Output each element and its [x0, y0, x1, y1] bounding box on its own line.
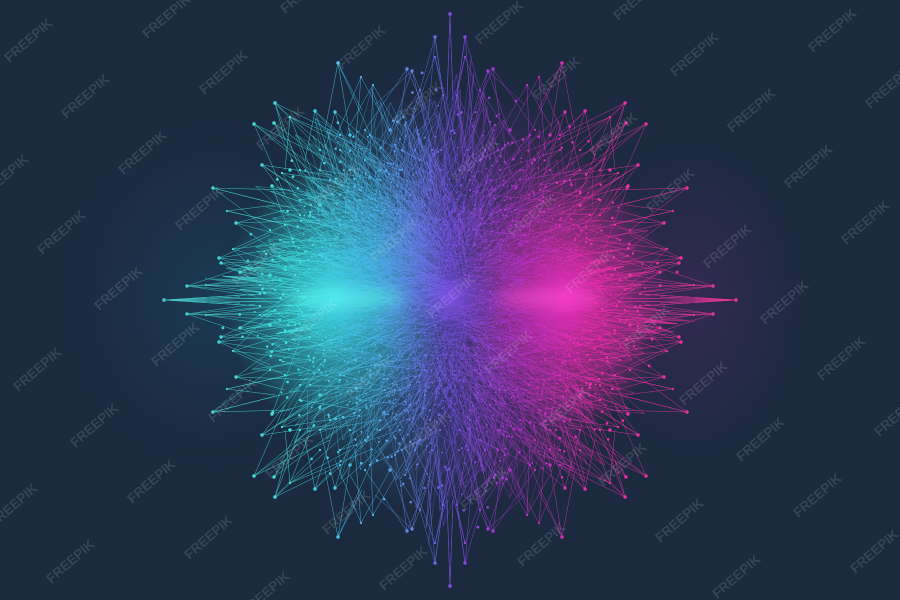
watermarks: FREEPIK — [709, 551, 764, 600]
watermarks: FREEPIK — [619, 302, 674, 352]
watermarks: FREEPIK — [67, 400, 122, 450]
watermarks: FREEPIK — [262, 431, 317, 481]
watermarks: FREEPIK — [529, 53, 584, 103]
watermarks: FREEPIK — [514, 519, 569, 569]
watermarks: FREEPIK — [805, 5, 860, 55]
watermarks: FREEPIK — [367, 215, 422, 265]
bright horizontal light streaks — [285, 288, 602, 308]
watermarks: FREEPIK — [1, 15, 56, 65]
watermarks: FREEPIK — [319, 487, 374, 537]
watermarks: FREEPIK — [757, 277, 812, 327]
watermarks: FREEPIK — [343, 351, 398, 401]
violet centre glow — [395, 248, 505, 348]
watermarks: FREEPIK — [457, 463, 512, 513]
watermarks: FREEPIK — [562, 246, 617, 296]
particle network web — [162, 12, 738, 588]
watermarks: FREEPIK — [391, 78, 446, 128]
watermarks: FREEPIK — [181, 512, 236, 562]
watermarks: FREEPIK — [781, 141, 836, 191]
left background glow — [65, 120, 365, 470]
watermarks: FREEPIK — [115, 127, 170, 177]
watermarks: FREEPIK — [652, 495, 707, 545]
watermarks: FREEPIK — [724, 85, 779, 135]
watermarks: FREEPIK — [448, 134, 503, 184]
cyan core glow — [225, 163, 445, 433]
watermarks: FREEPIK — [676, 358, 731, 408]
watermarks: FREEPIK — [124, 456, 179, 506]
watermarks: FREEPIK — [643, 165, 698, 215]
watermarks: FREEPIK — [847, 526, 900, 576]
watermarks: FREEPIK — [595, 439, 650, 489]
watermarks: FREEPIK — [376, 543, 431, 593]
watermarks: FREEPIK — [229, 239, 284, 289]
watermarks: FREEPIK — [10, 344, 65, 394]
watermarks: FREEPIK — [253, 103, 308, 153]
watermarks: FREEPIK — [424, 271, 479, 321]
watermarks: FREEPIK — [733, 414, 788, 464]
magenta core glow — [460, 168, 670, 428]
watermarks: FREEPIK — [34, 207, 89, 257]
watermarks: FREEPIK — [58, 71, 113, 121]
watermarks: FREEPIK — [586, 109, 641, 159]
watermarks: FREEPIK — [481, 327, 536, 377]
watermarks: FREEPIK — [43, 536, 98, 586]
watermarks: FREEPIK — [148, 319, 203, 369]
watermarks: FREEPIK — [310, 159, 365, 209]
watermarks: FREEPIK — [91, 263, 146, 313]
watermarks: FREEPIK — [505, 190, 560, 240]
sphere body colour wash — [268, 104, 637, 496]
watermarks: FREEPIK — [205, 375, 260, 425]
watermarks: FREEPIK — [334, 22, 389, 72]
watermarks: FREEPIK — [700, 221, 755, 271]
watermarks: FREEPIK — [196, 47, 251, 97]
right background glow — [570, 130, 810, 470]
watermarks: FREEPIK — [838, 197, 893, 247]
watermarks: FREEPIK — [667, 29, 722, 79]
watermarks: FREEPIK — [172, 183, 227, 233]
watermarks: FREEPIK — [400, 407, 455, 457]
watermarks: FREEPIK — [286, 295, 341, 345]
watermarks: FREEPIK — [538, 383, 593, 433]
watermarks: FREEPIK — [790, 470, 845, 520]
watermarks: FREEPIK — [814, 333, 869, 383]
